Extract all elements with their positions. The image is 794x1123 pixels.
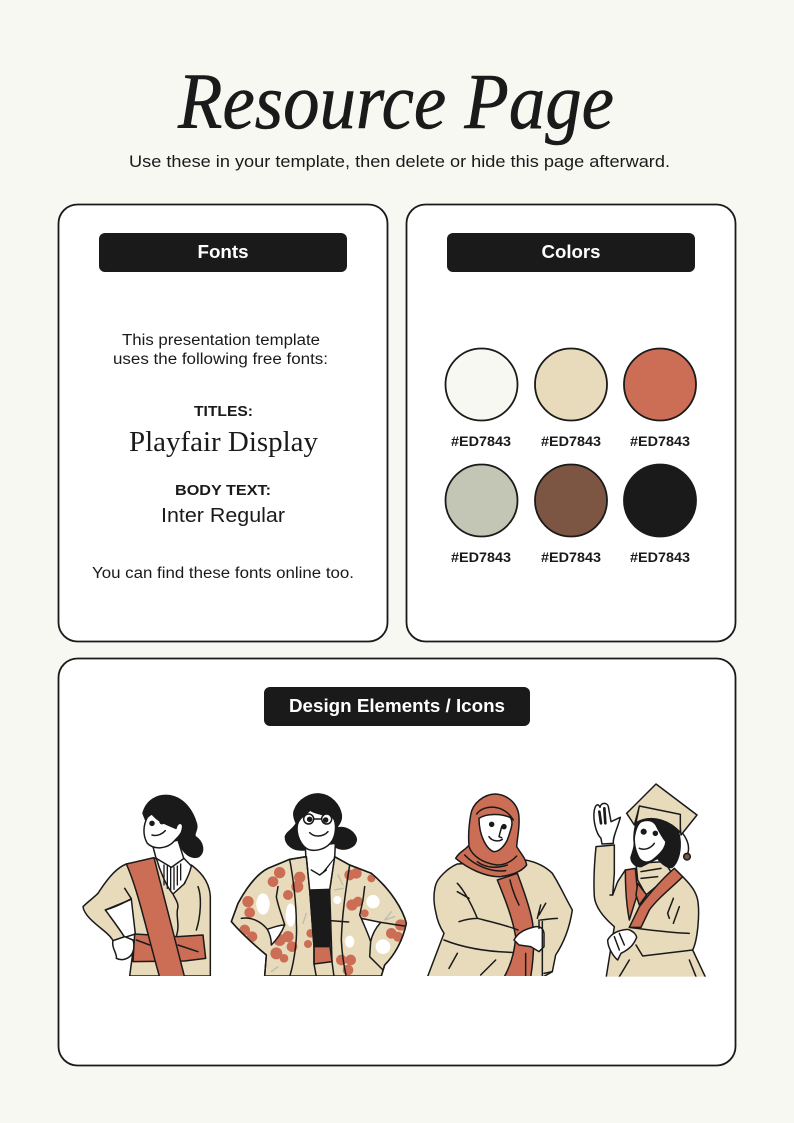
swatch: terracotta: #ED7843 — [630, 434, 691, 449]
heading: fonts: Fonts — [198, 242, 248, 262]
swatch: off-white: #ED7843 — [451, 434, 512, 449]
swatch: black: #ED7843 — [630, 550, 691, 565]
title: Resource Page — [177, 59, 614, 146]
intro text — [113, 332, 328, 368]
swatch: sage: #ED7843 — [451, 550, 512, 565]
icon: woman in floral kimono — [231, 794, 406, 977]
swatch: terracotta — [624, 348, 696, 449]
titles label: TITLES: — [194, 404, 253, 420]
heading: colors: Colors — [542, 242, 600, 262]
panel: design elements — [58, 658, 736, 1066]
heading: design elements: Design Elements / Icons — [289, 696, 505, 716]
swatch: cream — [535, 348, 607, 449]
panel: fonts — [58, 204, 388, 642]
swatch: black — [624, 464, 696, 565]
swatch: off-white — [446, 348, 518, 449]
closing note: You can find these fonts online too. — [92, 565, 354, 582]
title font name: Playfair Display — [129, 426, 318, 458]
intro text: uses the following free fonts: — [113, 351, 328, 368]
heading: colors — [447, 233, 695, 272]
subtitle: Use these in your template, then delete or hide this page afterward. — [129, 153, 670, 171]
heading: design elements — [264, 687, 530, 726]
swatch: brown: #ED7843 — [541, 550, 602, 565]
panel frame: fonts — [58, 204, 388, 642]
heading: fonts — [99, 233, 347, 272]
body font name: Inter Regular — [161, 505, 285, 527]
panel: colors — [406, 204, 736, 642]
icon: woman with sash — [83, 795, 210, 977]
icon: woman in hijab — [427, 794, 572, 977]
swatch: brown — [535, 464, 607, 565]
swatch: cream: #ED7843 — [541, 434, 602, 449]
panel frame: colors — [406, 204, 736, 642]
panel frame: design elements — [58, 658, 736, 1066]
icon: graduate waving — [594, 784, 706, 978]
intro text: This presentation template — [122, 332, 320, 349]
body text label: BODY TEXT: — [175, 483, 271, 499]
swatch: sage — [446, 464, 518, 565]
